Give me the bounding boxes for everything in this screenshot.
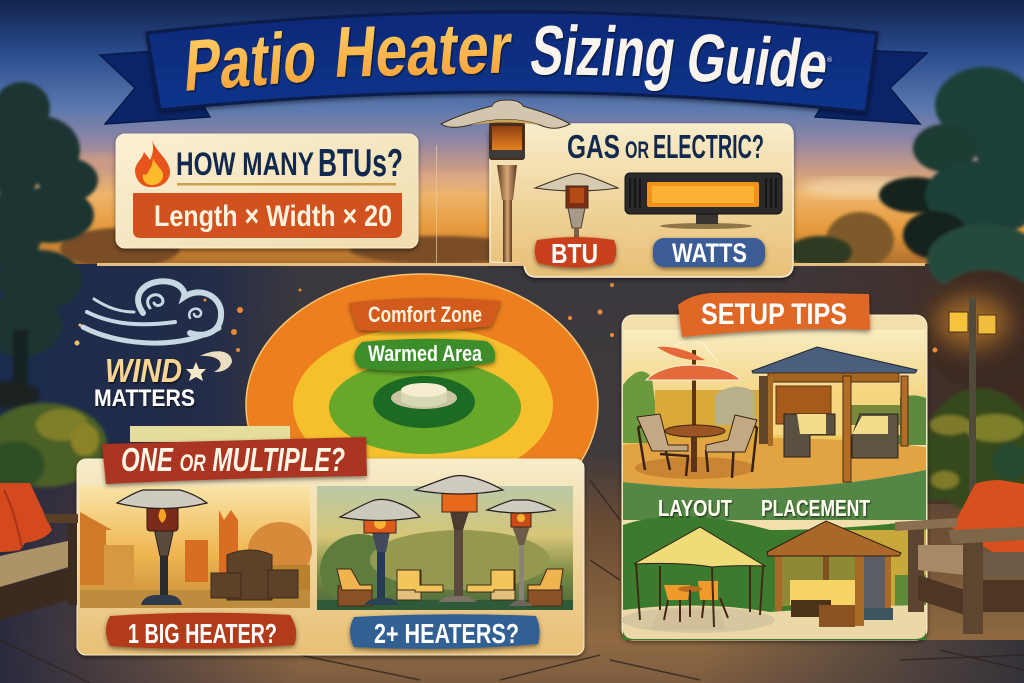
background: left bush [0,403,107,489]
panel: one or multiple [77,426,584,655]
panel: setup tips [621,293,927,640]
label: WATTS: WATTS [672,238,747,268]
zone: orange comfort [246,274,598,536]
heading: how many BTUs [176,142,403,185]
furniture: left sofa [397,570,443,600]
furniture: sofa left [784,414,835,457]
divider lines [97,145,925,266]
scene: one big heater [80,486,312,608]
furniture: right chair [528,569,563,606]
heading: gas or electric: GAS [567,128,620,165]
panel: gas or electric [490,124,793,277]
label: 1 big heater [106,613,296,649]
background: evening sky [0,0,1024,270]
scene: lower patio [621,516,926,640]
icon: umbrella [646,341,741,450]
furniture: right sofa [467,570,515,600]
label: warmed area [354,339,495,371]
icon: yellow canopy [634,527,765,630]
diagram: heat zones [246,274,598,536]
label: warmed area: Warmed Area [368,341,483,366]
label: BTU [535,237,616,269]
icon: small gas heater [535,174,618,240]
wind matters callout [83,281,232,412]
heading ribbon: one or multiple: ONE OR MULTIPLE? [121,441,345,478]
heading: how many BTUs: BTUs? [318,142,403,185]
zone: dark green centre [373,376,475,428]
background: horizon treeline [60,212,894,268]
scene: multiple heaters [317,476,573,610]
icon: star and swoosh [186,351,232,381]
furniture: sofa right [852,414,898,458]
title text: ® [827,56,833,64]
label: 1 big heater: 1 BIG HEATER? [128,618,277,649]
lamp post [934,296,1010,495]
icon: wooden gazebo [767,521,901,627]
heater: centre tall [415,476,503,602]
heater: right [487,500,555,606]
wind label: WIND [105,352,182,389]
title text: Guide [682,20,834,103]
label: placement: PLACEMENT [761,495,870,521]
background: paving stones [0,480,1024,683]
heater: big single [117,490,207,605]
heater: left [340,499,420,605]
icon: blue-roof pavilion [752,347,917,482]
label: BTU: BTU [551,238,598,269]
furniture: left sofa [0,483,78,620]
label: layout: LAYOUT [658,495,732,521]
icon: heater base disc [391,383,457,409]
icon: tall patio heater [441,100,570,262]
banner body [147,12,877,112]
scene: upper patio [623,330,926,520]
formula bar [133,193,402,238]
heading: gas or electric: ELECTRIC? [653,128,764,165]
label: comfort zone [349,298,501,331]
heading: gas or electric [567,128,764,165]
background: right bush [924,388,1024,512]
heading ribbon: setup tips: SETUP TIPS [701,298,847,331]
zone: yellow [293,327,553,483]
matters label: MATTERS [94,385,195,412]
title text: Patio [182,15,320,107]
formula bar: Length × Width × 20 [154,200,392,233]
furniture: right chair [706,415,757,478]
background: right tree [879,67,1024,390]
title text: Heater [331,8,515,93]
icon: table and chairs [637,414,757,478]
furniture: left chair [337,569,372,606]
furniture: right armchair [895,480,1024,634]
heading: gas or electric: OR [625,137,649,164]
panel: how many BTUs [116,134,418,248]
heading ribbon: setup tips [678,293,870,337]
title banner [100,8,927,124]
icon: wind cloud [83,281,221,343]
scene skyline [80,510,312,590]
background: patio ground [0,264,1024,683]
icon: electric heater [625,173,782,229]
title text: Sizing [526,10,681,91]
furniture: left chair [637,414,688,476]
banner tails [100,50,927,124]
scene bench [211,550,298,600]
icon: flame [135,140,170,187]
title text [182,8,834,107]
sparks [74,283,938,352]
heading ribbon: one or multiple [102,437,367,484]
label: comfort zone: Comfort Zone [368,302,482,327]
background: left tree [0,82,98,409]
label: 2+ heaters: 2+ HEATERS? [374,618,519,649]
heading: how many BTUs: HOW MANY [176,146,314,182]
zone: green warmed [329,360,521,454]
